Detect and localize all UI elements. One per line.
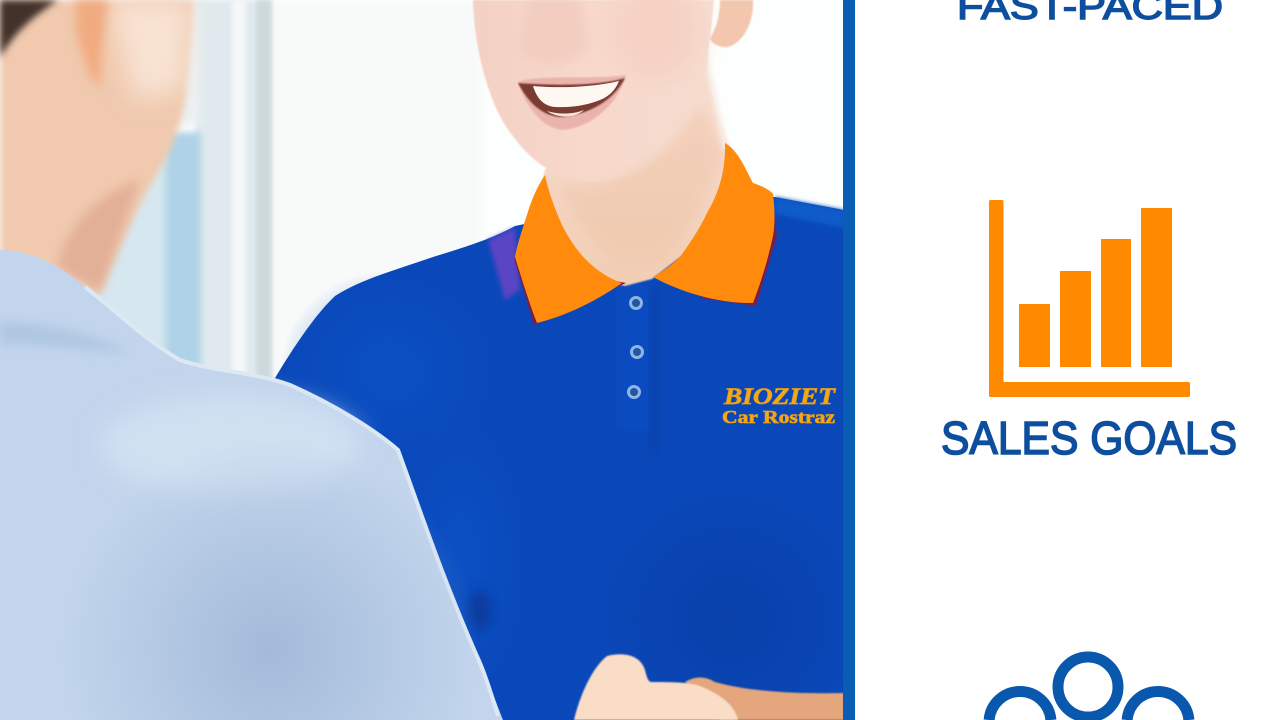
panel: photo of customer and sales associate [0,0,844,720]
neck [542,63,728,287]
customer from behind [0,0,503,720]
customer arm and hand [574,654,844,720]
lips [518,75,626,130]
ear [710,0,753,47]
polo shirt body [250,197,844,720]
neck shadow [58,180,140,292]
ear [76,0,108,88]
icon: team circles [989,657,1189,720]
panel: right column [941,0,1237,720]
nose shading [530,0,583,59]
neck shadow [568,111,722,245]
vertical blue divider [843,0,855,720]
shirt lit shoulder [100,395,360,495]
office window background [92,0,276,378]
collar fold shadow [0,322,115,351]
customer neck and head [0,0,193,295]
customer light blue shirt [0,250,503,720]
hair [0,0,58,58]
mouth interior [518,78,625,117]
shirt logo text: BIOZIET [723,384,836,409]
collar edge shadow [514,216,777,325]
placket buttons [628,298,642,398]
face [473,0,714,182]
head highlight [108,0,190,100]
shirt logo text: Car Rostraz [722,407,835,427]
upper teeth [533,81,619,107]
heading: sales goals: SALES GOALS [941,412,1237,464]
smile [518,75,626,130]
shirt shading [280,197,844,720]
shirt dark folds [116,482,465,720]
collar [514,143,777,325]
collar left [515,175,622,323]
shirt pale edge [85,287,498,716]
pale hair wisps by neck [706,55,728,151]
shirt logo text [722,388,836,424]
lower teeth [547,110,584,117]
sales associate: neck and face [473,0,753,286]
collar right [653,143,774,303]
icon: sales bar chart [989,200,1190,397]
cheek shading [614,0,697,66]
